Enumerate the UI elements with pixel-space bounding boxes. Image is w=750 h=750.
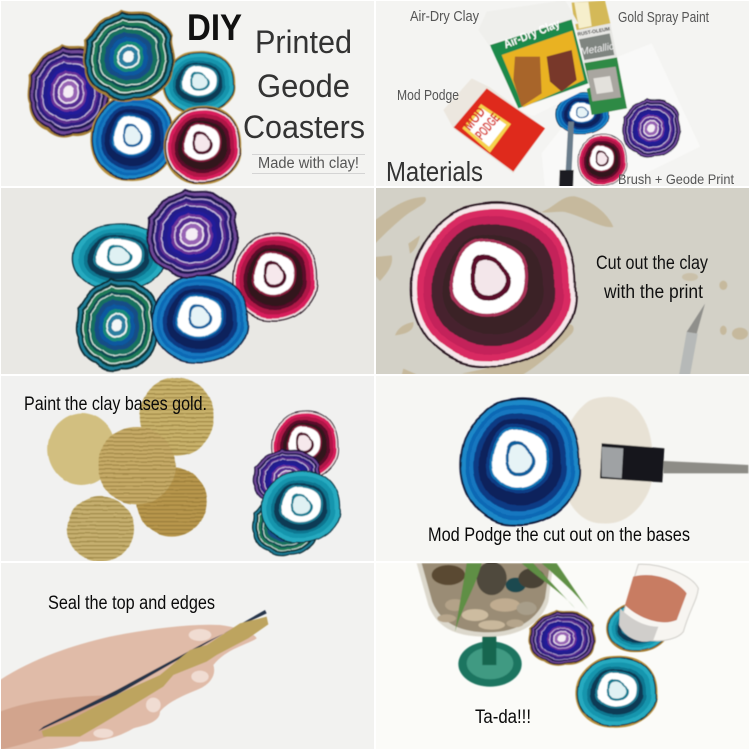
photo: materials flat lay (443, 0, 700, 188)
subtitle: Made with clay: Made with clay! (258, 155, 359, 172)
panel: cut out the clay (375, 188, 749, 375)
clay scraps (375, 196, 748, 375)
photo: hand holding coaster edge-on (0, 610, 268, 750)
label: Mod Podge: Mod Podge (397, 88, 459, 104)
label: Brush + Geode Print: Brush + Geode Print (618, 171, 734, 187)
brush (559, 122, 574, 188)
drink glass (619, 564, 698, 642)
caption: Seal the top and edges: Seal the top and edges (48, 593, 215, 614)
panel: finished coasters (376, 562, 749, 749)
pale clay base (560, 397, 653, 524)
heading: Materials: Materials (386, 156, 483, 187)
paper sheet (558, 58, 682, 186)
heading: Printed Geode Coasters: Geode (257, 68, 350, 104)
panel: mod podge the cut out (376, 376, 749, 561)
clay tub (490, 12, 590, 109)
spray can: Metallic (580, 41, 615, 58)
panel: title (1, 1, 374, 186)
caption: Cut out the clay with the print: Cut out the clay (596, 253, 708, 274)
mod podge jar: MOD (460, 104, 488, 133)
photo: styled coasters with plant and drink (417, 562, 698, 728)
plant leaves (455, 563, 588, 632)
photo: gold bases and prints (48, 378, 340, 562)
caption: Paint the clay bases gold: Paint the clay bases gold. (24, 394, 207, 415)
caption: Cut out the clay with the print: with the print (603, 282, 704, 303)
heading: Printed Geode Coasters: Printed (255, 24, 352, 60)
label: Gold Spray Paint: Gold Spray Paint (618, 10, 709, 26)
heading: Printed Geode Coasters (244, 30, 364, 138)
panel: materials (376, 0, 749, 188)
heading: DIY: DIY (187, 7, 242, 48)
label: Air-Dry Clay: Air-Dry Clay (410, 9, 480, 25)
sponge brush (600, 443, 748, 482)
photo: five paper prints (72, 189, 317, 372)
fingernails (93, 629, 211, 738)
caption: Mod Podge the cut out on the bases: Mod Podge the cut out on the bases (428, 525, 690, 546)
heading: Printed Geode Coasters: Coasters (243, 109, 365, 145)
gold coaster edge (38, 610, 268, 737)
craft knife (679, 304, 705, 375)
teal coaster (575, 656, 658, 728)
blue print (459, 397, 580, 526)
blue coaster (606, 603, 668, 652)
purple coaster (528, 610, 596, 666)
photo: print, base and brush (459, 397, 748, 526)
printed geode: red (577, 134, 627, 186)
mod podge jar (443, 78, 545, 173)
goblet foot (458, 635, 522, 687)
printed geode: blue (555, 92, 609, 135)
mod podge jar: PODGE (472, 110, 503, 143)
stacked prints (252, 410, 340, 556)
photo: five finished coasters (28, 10, 241, 184)
caption: Ta-da: Ta-da!!! (475, 707, 531, 728)
panel: paint bases gold (1, 376, 374, 562)
printed geode: purple (622, 98, 681, 158)
caption: Cut out the clay with the print (596, 253, 708, 303)
goblet with pebbles (417, 562, 553, 637)
gold disc (48, 378, 214, 562)
spray can: RUST-OLEUM (577, 26, 610, 38)
spray can (572, 1, 627, 115)
clay tub: Air-Dry Clay (502, 16, 562, 51)
panel: printed geode cut-outs (1, 188, 374, 374)
photo: red print on clay with craft knife (375, 196, 748, 375)
panel: seal top and edges (0, 563, 374, 750)
hand (0, 625, 257, 750)
